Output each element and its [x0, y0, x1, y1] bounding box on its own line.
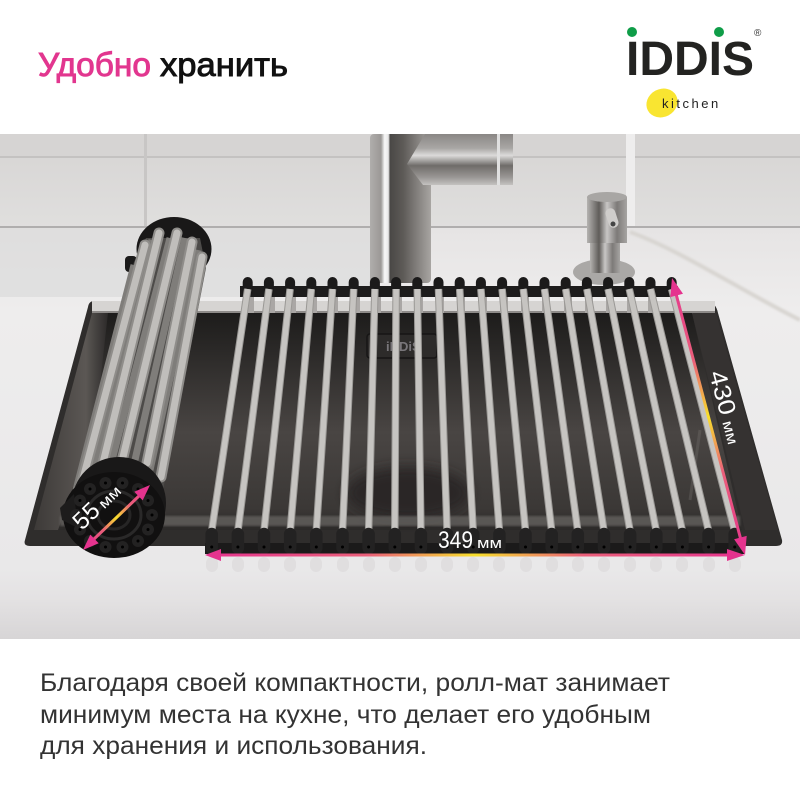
label: 430 mm: мм: [718, 419, 741, 446]
label: 55 mm: мм: [95, 483, 125, 512]
label: 349 mm: мм: [477, 535, 502, 552]
faucet: [370, 134, 513, 283]
marble counter: [0, 228, 800, 639]
bottom nubs: [212, 534, 735, 548]
top bar: [240, 286, 678, 297]
label: 349 mm: 349: [438, 527, 473, 554]
left wall: [34, 313, 108, 530]
dimension arrow: 349 mm: [205, 549, 745, 561]
roll mat: rolled: [60, 217, 212, 558]
title: хранить: [160, 46, 288, 83]
wall tiles: [0, 134, 800, 229]
nub holes: [212, 546, 735, 548]
logo: IDDIS kitchen: kitchen: [662, 96, 721, 111]
bottom bar: [205, 543, 745, 554]
dimension arrow: 430 mm: [670, 278, 747, 555]
front end cap: [60, 457, 166, 558]
cap holes: [76, 483, 152, 547]
logo: IDDIS kitchen: IDDIS: [626, 33, 754, 86]
sink floor: [40, 313, 742, 530]
description text: Благодаря своей компактности, ролл-мат занимает: [40, 669, 671, 697]
label: 430 mm: 430: [703, 368, 741, 418]
roll body: [70, 238, 206, 505]
roll rods, back: [76, 238, 198, 490]
back end cap: [136, 217, 212, 281]
sink brand plate: iDDiS: [386, 339, 421, 354]
description text: минимум места на кухне, что делает его удобным: [40, 701, 651, 729]
photo: kitchen sink with roll mat: [0, 134, 800, 639]
title: Удобно: [38, 46, 151, 83]
roll rods, front: [80, 233, 202, 490]
label: 55 mm: 55: [67, 497, 106, 535]
description text: [40, 669, 671, 760]
top nubs: [248, 282, 672, 292]
right wall: [692, 313, 778, 530]
mat reflections on counter: [212, 563, 735, 566]
front reflection band: [60, 516, 740, 526]
label: 430 mm: [703, 368, 749, 447]
label: 349 mm: [438, 527, 502, 554]
roll mat: flat: [205, 282, 745, 554]
sink: [25, 301, 782, 546]
rim shadow of mat: [250, 297, 652, 313]
title: [38, 46, 288, 83]
soap dispenser: [573, 192, 635, 285]
logo: IDDIS kitchen: [626, 27, 762, 123]
dimension arrow: 55 mm: [83, 485, 150, 550]
logo: IDDIS kitchen: ®: [754, 28, 762, 39]
side clip: [125, 256, 137, 272]
rods: [212, 289, 735, 531]
label: 55 mm: [67, 477, 126, 535]
sink brand plate: [367, 334, 437, 358]
drain shadow: [346, 467, 470, 519]
description text: для хранения и использования.: [40, 732, 427, 760]
